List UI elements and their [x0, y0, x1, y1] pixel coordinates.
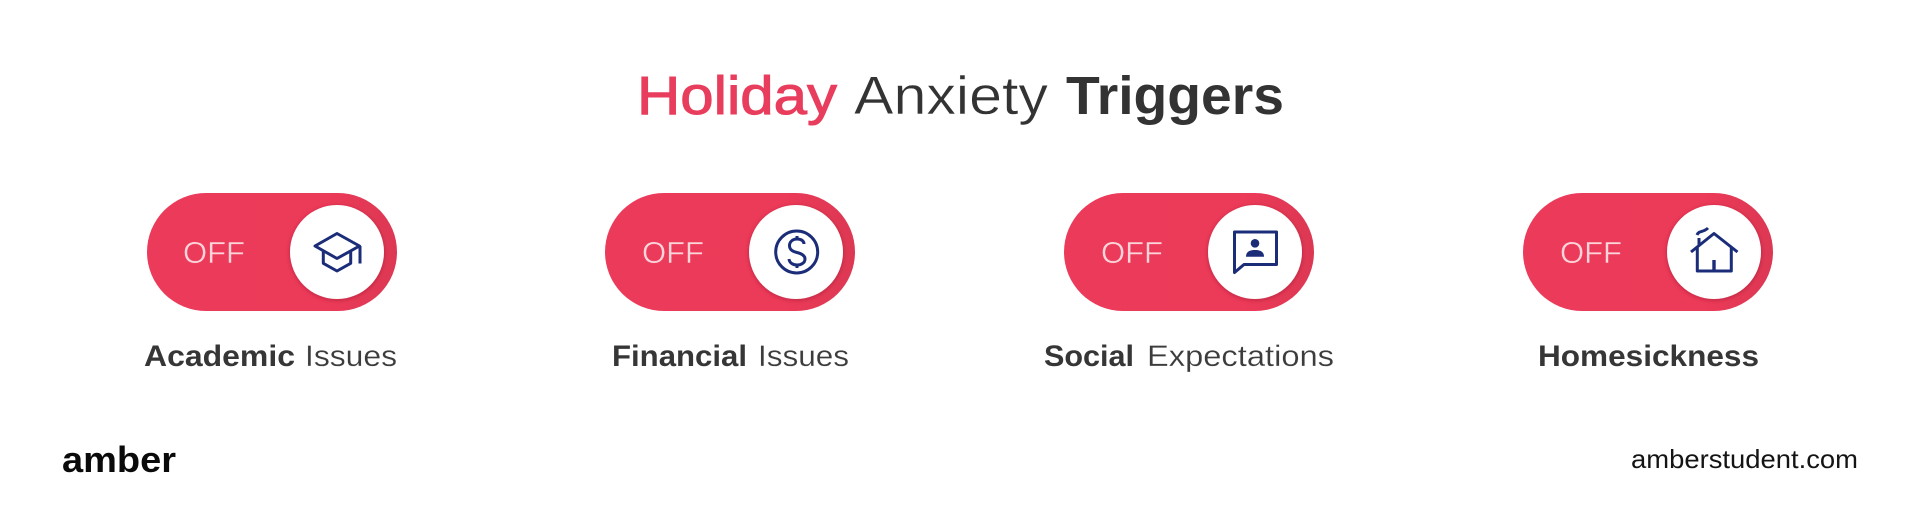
- off label: OFF: [1101, 235, 1163, 270]
- icon: graduation cap: [315, 234, 360, 271]
- panel: academic issues: [144, 193, 397, 373]
- label: academic issues: Academic: [144, 340, 295, 373]
- toggle knob: [1667, 205, 1761, 299]
- label: financial issues: [612, 340, 849, 373]
- title: [637, 66, 1284, 126]
- title: Holiday: [637, 66, 837, 126]
- label: social expectations: Expectations: [1147, 340, 1334, 373]
- toggle track: [605, 193, 855, 311]
- label: financial issues: Issues: [758, 340, 849, 373]
- label: homesickness: Homesickness: [1538, 340, 1759, 373]
- toggle track: [147, 193, 397, 311]
- title: Triggers: [1066, 66, 1284, 126]
- toggle knob: [290, 205, 384, 299]
- off label: OFF: [183, 235, 245, 270]
- toggle knob: [749, 205, 843, 299]
- off label: OFF: [642, 235, 704, 270]
- label: financial issues: Financial: [612, 340, 747, 373]
- label: social expectations: [1044, 340, 1334, 373]
- panel: financial issues: [605, 193, 855, 373]
- icon: chat with person: [1234, 232, 1276, 272]
- icon: dollar coin: [776, 231, 818, 273]
- logo: amber: amber: [62, 439, 176, 480]
- toggle knob: [1208, 205, 1302, 299]
- title: Anxiety: [854, 66, 1048, 126]
- label: academic issues: Issues: [305, 340, 397, 373]
- label: academic issues: [144, 340, 397, 373]
- icon: house with chimney: [1691, 228, 1738, 271]
- website url: amberstudent.com: [1631, 444, 1858, 474]
- toggle track: [1064, 193, 1314, 311]
- panel: social expectations: [1044, 193, 1334, 373]
- label: social expectations: Social: [1044, 340, 1134, 373]
- panel: homesickness: [1523, 193, 1773, 373]
- off label: OFF: [1560, 235, 1622, 270]
- toggle track: [1523, 193, 1773, 311]
